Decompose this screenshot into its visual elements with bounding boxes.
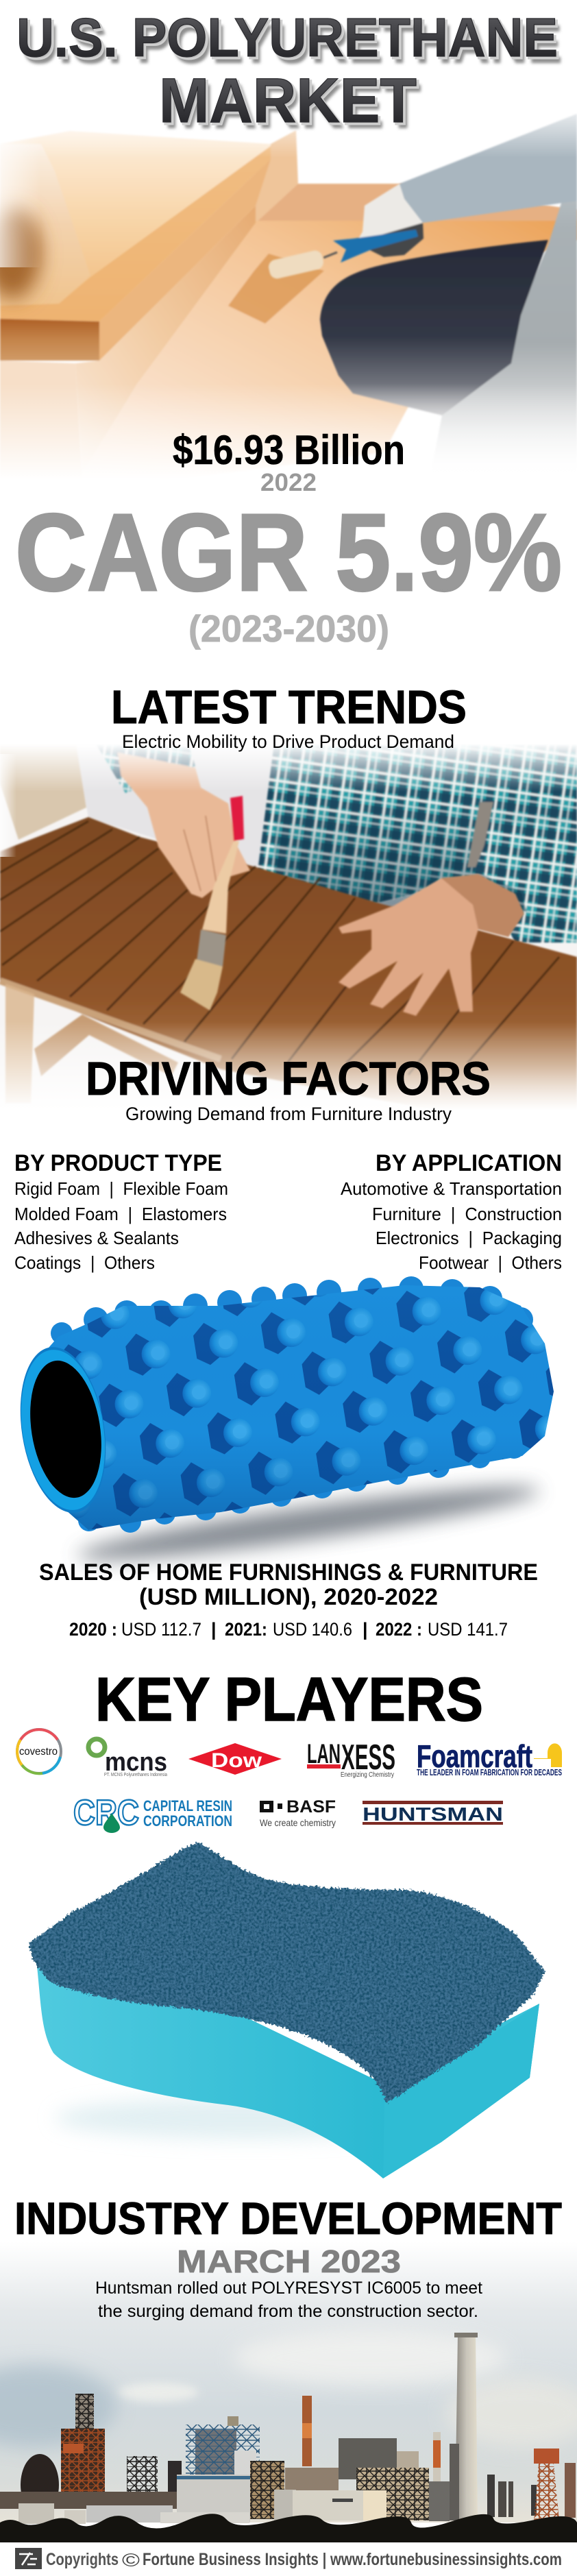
logo: Huntsman xyxy=(363,1801,503,1825)
heading: latest trends: LATEST TRENDS xyxy=(111,681,467,733)
logo: mcns: PT. MCNS Polyurethanes Indonesia xyxy=(104,1773,167,1777)
central plant xyxy=(160,2416,284,2523)
sales figures 2020-2022: | xyxy=(363,1619,368,1640)
sales figures 2020-2022: USD 140.6 xyxy=(273,1619,352,1640)
title: U.S. POLYURETHANE xyxy=(21,14,563,75)
title: MARKET xyxy=(159,66,417,136)
logo: Lanxess xyxy=(307,1738,395,1779)
CAGR period: (2023-2030) xyxy=(188,607,389,650)
logo: Capital Resin Corporation xyxy=(73,1793,232,1833)
image: blue foam roller xyxy=(0,1275,577,1572)
logo: BASF: BASF xyxy=(286,1797,336,1816)
sitting person xyxy=(267,114,577,476)
chart heading: sales of home furnishings: SALES OF HOME FURNISHINGS & FURNITURE xyxy=(39,1559,538,1585)
icon: Fortune Business Insights logo xyxy=(15,2548,42,2569)
tall chimney xyxy=(450,2333,478,2520)
logo: Capital Resin Corporation: CAPITAL RESIN xyxy=(143,1797,232,1814)
panel: by product type: Adhesives & Sealants xyxy=(14,1228,179,1248)
title: MARKET xyxy=(164,72,421,142)
panel: by product type: BY PRODUCT TYPE xyxy=(14,1150,222,1176)
left hand with brush xyxy=(92,737,250,1010)
latest trends subtitle: Electric Mobility to Drive Product Demand xyxy=(122,731,454,752)
photo: wood stair being coated with roller xyxy=(0,0,577,500)
logo: Huntsman: HUNTSMAN xyxy=(363,1803,503,1825)
right plant xyxy=(274,2432,450,2521)
shirt xyxy=(258,744,577,943)
logo: mcns xyxy=(88,1739,167,1777)
logo: Foamcraft: Foamcraft xyxy=(417,1738,532,1774)
footer xyxy=(0,2542,577,2576)
panel: by product type xyxy=(14,1150,228,1273)
heading: driving factors: DRIVING FACTORS xyxy=(86,1052,491,1105)
orange chimney xyxy=(302,2396,312,2466)
logo: BASF xyxy=(260,1797,336,1828)
development date: MARCH 2023 xyxy=(177,2244,401,2279)
bench xyxy=(0,817,577,1138)
logo: mcns: mcns xyxy=(105,1748,167,1777)
panel: by application: Electronics | Packaging xyxy=(376,1228,562,1248)
sales figures 2020-2022: 2022 : xyxy=(376,1619,422,1640)
title: MARKET xyxy=(161,68,419,138)
title: U.S. POLYURETHANE xyxy=(19,9,560,70)
far right towers xyxy=(487,2449,576,2520)
development description: the surging demand from the construction sector. xyxy=(98,2302,478,2321)
logo: Capital Resin Corporation: CORPORATION xyxy=(143,1812,232,1830)
logo: covestro: covestro xyxy=(19,1746,58,1758)
chart heading: sales of home furnishings: (USD MILLION), 2020-2022 xyxy=(139,1584,438,1610)
chart heading: sales of home furnishings xyxy=(39,1559,538,1610)
market size value: $16.93 Billion xyxy=(173,427,405,473)
logo: Lanxess: Energizing Chemistry xyxy=(341,1771,394,1779)
sales figures 2020-2022: USD 112.7 xyxy=(121,1619,201,1640)
panel: by application: BY APPLICATION xyxy=(376,1150,562,1176)
logo: Dow: Dow xyxy=(211,1749,262,1772)
chair post and wall xyxy=(0,727,490,871)
panel: by application: Automotive & Transportation xyxy=(341,1178,562,1199)
sales figures 2020-2022: 2021: xyxy=(225,1619,267,1640)
photo: refinery skyline xyxy=(0,2241,577,2542)
image: scouring sponge xyxy=(29,1843,545,2178)
development description: Huntsman rolled out POLYRESYST IC6005 to meet xyxy=(95,2279,482,2298)
logo: Capital Resin Corporation: CRC xyxy=(73,1793,139,1833)
left refinery xyxy=(0,2394,182,2524)
panel: by product type: Rigid Foam | Flexible Foam xyxy=(14,1178,228,1199)
driving factors subtitle: Growing Demand from Furniture Industry xyxy=(125,1104,452,1124)
panel: by application: Footwear | Others xyxy=(419,1252,562,1273)
footer: © xyxy=(122,2550,140,2571)
tree line xyxy=(0,2514,577,2542)
sales figures 2020-2022: | xyxy=(211,1619,217,1640)
logo: Dow xyxy=(188,1743,282,1775)
right hand xyxy=(339,874,524,1016)
logo: BASF: We create chemistry xyxy=(260,1817,336,1828)
logo: Lanxess: LAN xyxy=(307,1739,341,1769)
development description xyxy=(95,2279,482,2321)
title xyxy=(16,7,563,142)
heading: key players: KEY PLAYERS xyxy=(95,1666,483,1734)
title: U.S. POLYURETHANE xyxy=(16,7,558,68)
panel: by application: Furniture | Construction xyxy=(372,1204,562,1224)
panel: by product type: Coatings | Others xyxy=(14,1252,155,1273)
footer: Copyrights xyxy=(46,2550,119,2569)
sales figures 2020-2022: 2020 : xyxy=(69,1619,117,1640)
sales figures 2020-2022 xyxy=(69,1619,508,1640)
panel: by product type: Molded Foam | Elastomers xyxy=(14,1204,227,1224)
panel: by application xyxy=(341,1150,562,1273)
photo: brushing stain on bench xyxy=(0,723,577,1141)
sales figures 2020-2022: USD 141.7 xyxy=(428,1619,508,1640)
logo: covestro xyxy=(17,1729,61,1773)
logo: Lanxess: XESS xyxy=(341,1738,395,1777)
market size year: 2022 xyxy=(260,468,317,496)
